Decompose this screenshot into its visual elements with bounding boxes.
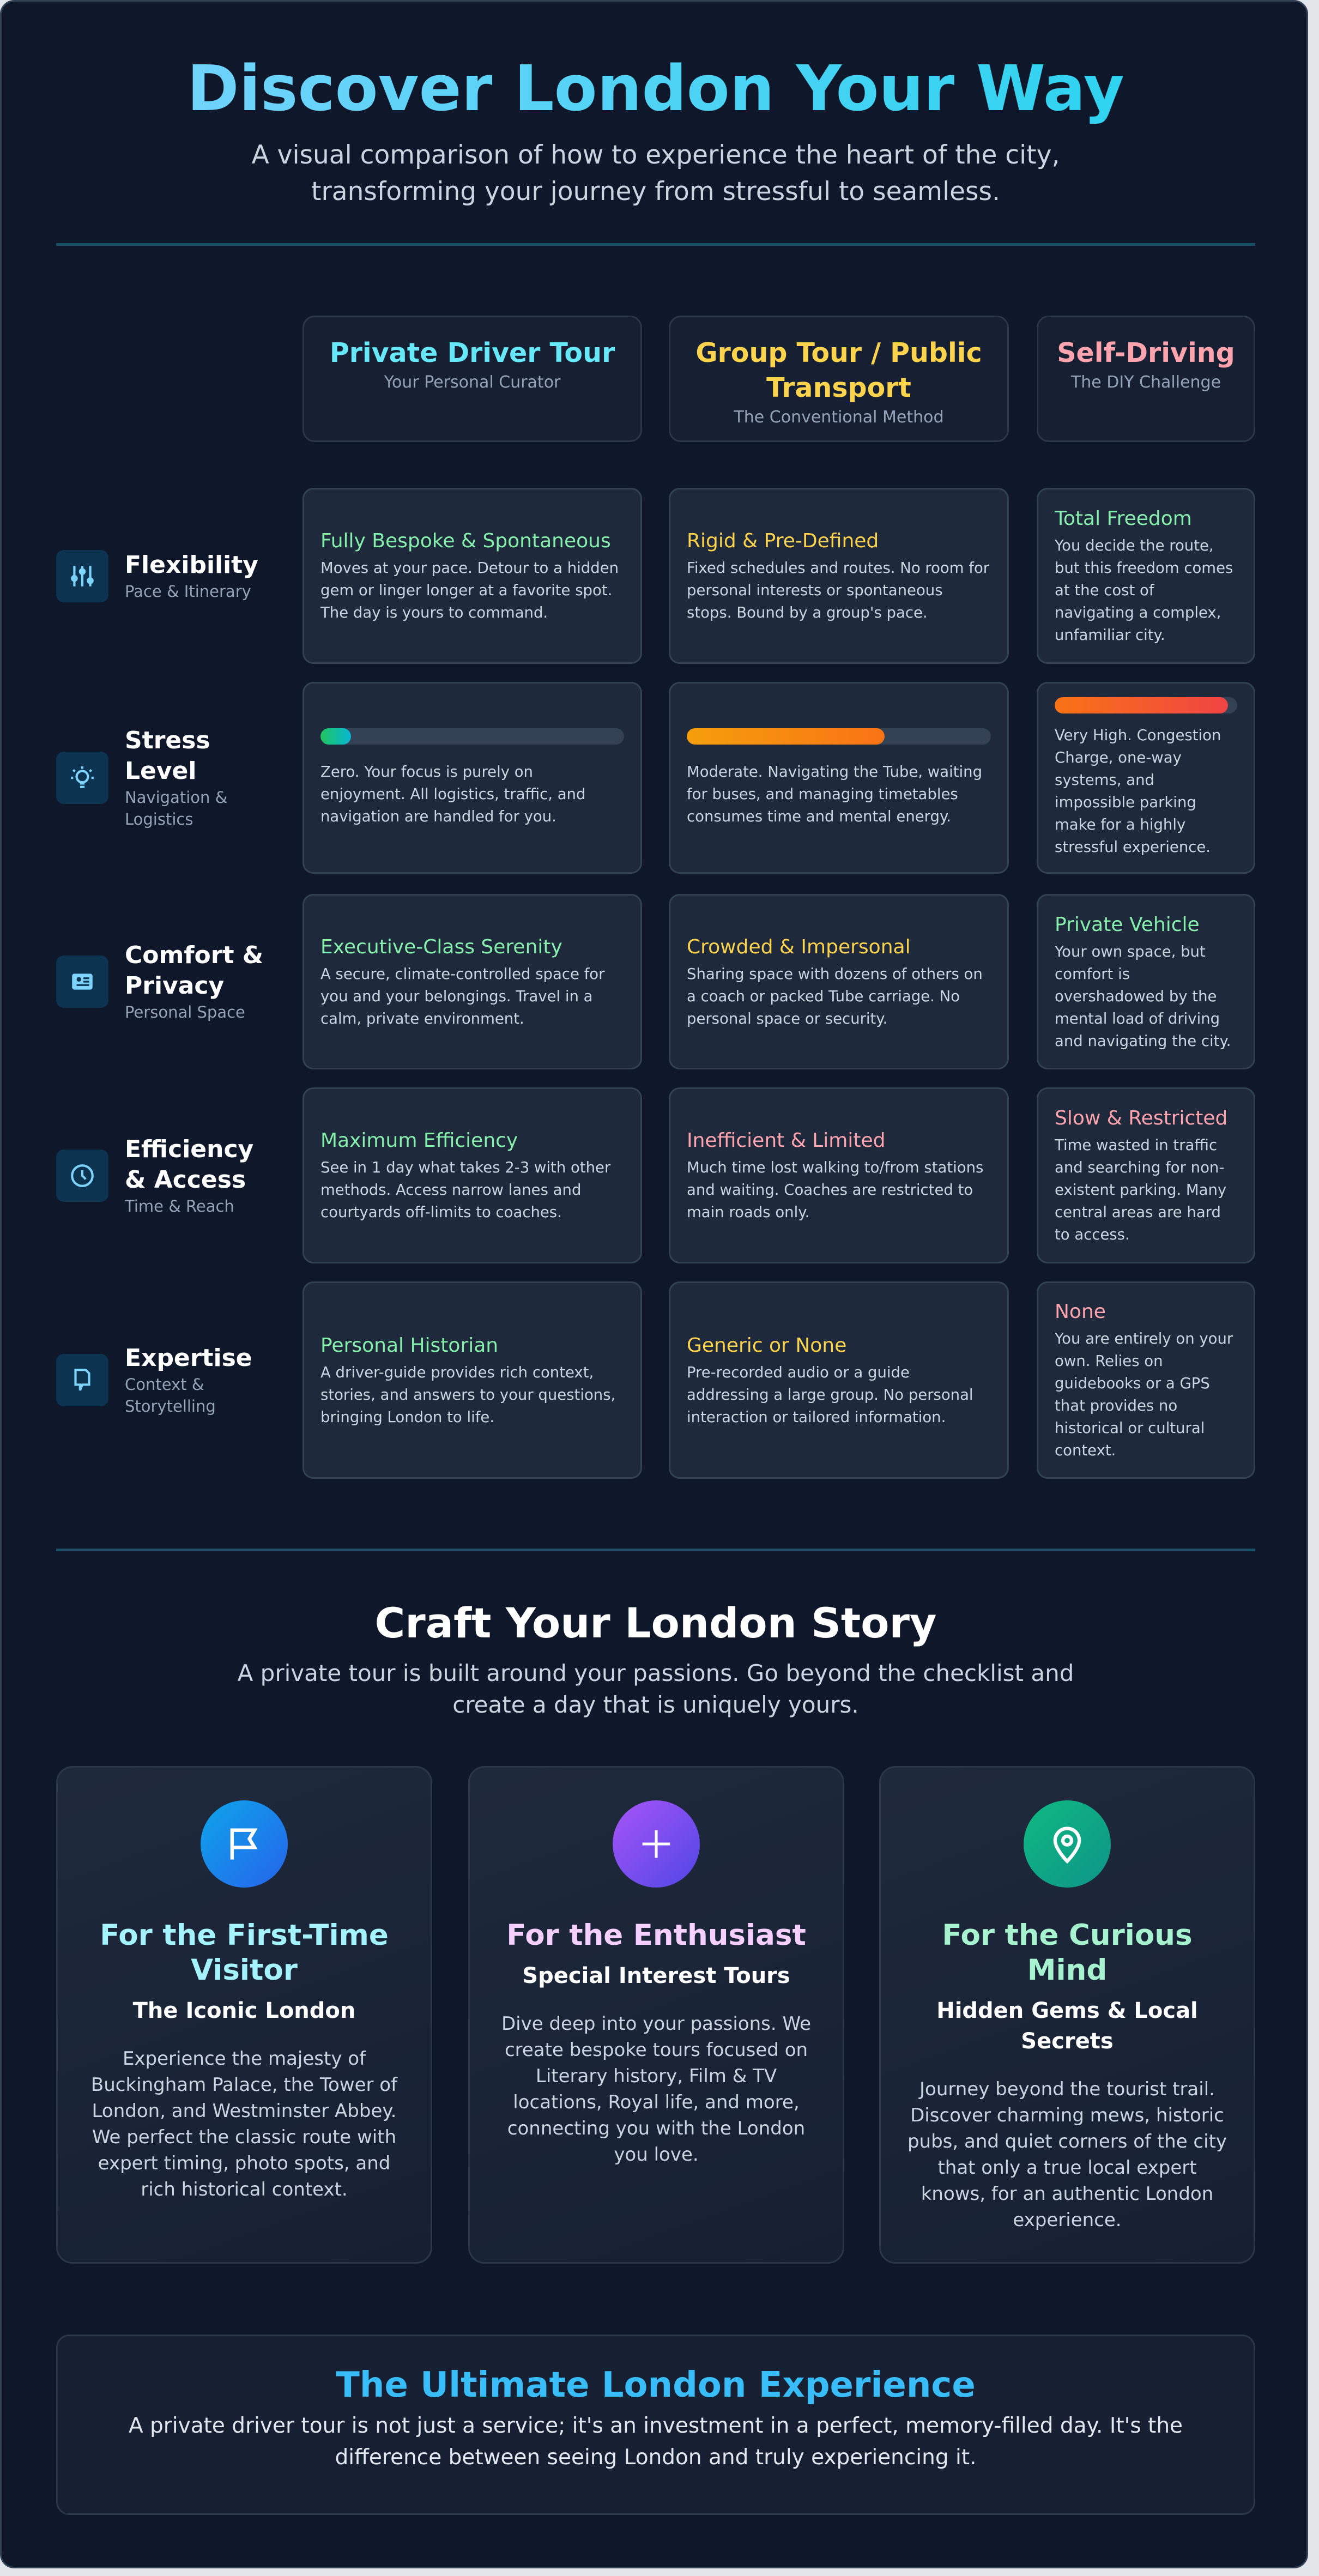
card: efficiency private: courtyards off-limits to coaches.: [320, 1204, 562, 1221]
persona card: first-time: The Iconic London: [133, 1998, 355, 2023]
row label: efficiency: Time & Reach: [125, 1197, 234, 1216]
row label: efficiency: & Access: [125, 1165, 246, 1194]
persona card: curious: For the Curious Mind: [942, 1919, 1193, 1987]
card: stress self: [1037, 682, 1255, 874]
column header: private driver: Your Personal Curator: [384, 373, 560, 392]
row label: comfort: [56, 941, 263, 1021]
card: expertise self: None: [1055, 1301, 1106, 1323]
card: comfort private: Executive-Class Serenity: [320, 935, 562, 958]
card: stress private: Zero. Your focus is purely on: [320, 763, 533, 781]
card: flex group: Fixed schedules and routes. No room for personal interests or spontaneous stops. Bound by a group's pace.: [687, 559, 989, 621]
persona card: enthusiast: For the Enthusiast: [506, 1919, 806, 1952]
card: efficiency private: [302, 1087, 642, 1263]
card: efficiency group: [669, 1087, 1009, 1263]
icon: flag: [201, 1800, 288, 1888]
section subtitle: A private tour is built around your passions. Go beyond the checklist and create a day that is uniquely yours.: [238, 1660, 1074, 1718]
persona card: first-time: Experience the majesty of Buckingham Palace, the Tower of London, and Westminster Abbey. We perfect the classic route with expert timing, photo spots, and rich historical context.: [91, 2048, 397, 2200]
card: flex self: Total Freedom: [1055, 507, 1192, 530]
icon: plus: [613, 1800, 700, 1888]
card: expertise group: Generic or None: [687, 1334, 846, 1356]
card: comfort self: Private Vehicle: [1055, 914, 1200, 935]
row label: efficiency: [56, 1135, 253, 1216]
card: flex self: You decide the route, but this freedom comes at the cost of navigating a complex, unfamiliar city.: [1055, 537, 1233, 644]
row label: comfort: Privacy: [125, 972, 224, 1000]
card: expertise private: A driver-guide provides rich context, stories, and answers to your questions, bringing London to life.: [320, 1364, 615, 1426]
persona card: enthusiast: Special Interest Tours: [522, 1963, 790, 1988]
row label: comfort: Comfort &: [125, 941, 263, 969]
column header: private driver: [302, 316, 642, 442]
row label: efficiency: Efficiency: [125, 1135, 253, 1163]
card: efficiency self: [1037, 1087, 1255, 1263]
row label: flexibility: [56, 550, 258, 602]
title: [2, 45, 1310, 132]
card: stress group: [669, 682, 1009, 874]
row label: stress: [56, 727, 227, 829]
card: stress group: Moderate. Navigating the Tube, waiting for buses, and managing timetables consumes time and mental energy.: [687, 763, 982, 825]
row label: flexibility: Flexibility: [125, 551, 258, 579]
column header: group tour: Group Tour / Public Transport: [695, 337, 982, 403]
closing callout: A private driver tour is not just a service; it's an investment in a perfect, memory-filled day. It's the difference between seeing London and truly experiencing it.: [129, 2414, 1183, 2470]
card: comfort group: Sharing space with dozens of others on a coach or packed Tube carriage. No personal space or security.: [687, 965, 983, 1027]
section heading: Craft Your London Story: [375, 1599, 936, 1647]
card: efficiency private: See in 1 day what takes 2-3 with other methods. Access narrow lanes and: [320, 1159, 610, 1199]
card: comfort self: Your own space, but comfort is overshadowed by the mental load of driving and navigating the city.: [1055, 943, 1231, 1050]
card: efficiency group: Much time lost walking to/from stations and waiting. Coaches are restricted to main roads only.: [687, 1159, 983, 1221]
card: flex private: Fully Bespoke & Spontaneous: [320, 530, 611, 552]
card: stress private: [302, 682, 642, 874]
persona card: enthusiast: Dive deep into your passions. We create bespoke tours focused on Literary history, Film & TV locations, Royal life, and more, connecting you with the London you love.: [501, 2013, 811, 2166]
column header: private driver: Private Driver Tour: [330, 337, 615, 368]
row label: expertise: Storytelling: [125, 1397, 216, 1416]
row label: stress: Stress: [125, 727, 210, 754]
persona card: curious: [879, 1766, 1255, 2264]
card: stress self: Very High. Congestion Charge, one-way systems, and impossible parking make for a highly stressful experience.: [1055, 727, 1221, 856]
row label: stress: Navigation &: [125, 788, 227, 807]
card: flex group: [669, 488, 1009, 664]
card: comfort group: Crowded & Impersonal: [687, 935, 911, 958]
row label: stress: Level: [125, 757, 196, 785]
row label: expertise: Context &: [125, 1375, 204, 1394]
card: expertise self: [1037, 1281, 1255, 1479]
card: expertise group: addressing a large group. No personal interaction or tailored information.: [687, 1386, 973, 1426]
card: comfort private: [302, 894, 642, 1069]
persona card: enthusiast: [468, 1766, 844, 2264]
card: comfort group: [669, 894, 1009, 1069]
card: stress private: enjoyment. All logistics, traffic, and navigation are handled for you.: [320, 785, 585, 825]
row label: comfort: Personal Space: [125, 1003, 245, 1021]
subtitle: A visual comparison of how to experience the heart of the city, transforming your journey from stressful to seamless.: [252, 140, 1060, 207]
column header: self-driving: [1037, 316, 1255, 442]
card: flex self: [1037, 488, 1255, 664]
card: expertise group: [669, 1281, 1009, 1479]
card: comfort self: [1037, 894, 1255, 1069]
persona card: curious: Hidden Gems & Local Secrets: [936, 1998, 1198, 2054]
column header: group tour: The Conventional Method: [734, 408, 944, 427]
title: Discover London Your Way: [187, 52, 1124, 125]
persona card: first-time: [56, 1766, 432, 2264]
row label: expertise: [56, 1344, 252, 1416]
persona card: curious: Journey beyond the tourist trail. Discover charming mews, historic pubs, and quiet corners of the city that only a true local expert knows, for an authentic London experience.: [907, 2078, 1227, 2231]
persona card: first-time: For the First-Time Visitor: [100, 1919, 389, 1987]
icon: pin: [1024, 1800, 1111, 1888]
column header: self-driving: The DIY Challenge: [1071, 373, 1221, 392]
card: efficiency private: Maximum Efficiency: [320, 1129, 518, 1152]
card: expertise group: Pre-recorded audio or a guide: [687, 1364, 910, 1381]
card: efficiency self: Slow & Restricted: [1055, 1107, 1227, 1129]
card: comfort private: A secure, climate-controlled space for you and your belongings. Travel in a calm, private environment.: [320, 965, 604, 1027]
closing callout: [56, 2335, 1255, 2515]
card: flex private: Moves at your pace. Detour to a hidden gem or linger longer at a favorite spot. The day is yours to command.: [320, 559, 619, 621]
card: expertise private: [302, 1281, 642, 1479]
column header: self-driving: Self-Driving: [1057, 337, 1235, 368]
card: flex private: [302, 488, 642, 664]
row label: expertise: Expertise: [125, 1344, 252, 1372]
row label: flexibility: Pace & Itinerary: [125, 582, 251, 601]
card: efficiency self: Time wasted in traffic and searching for non-existent parking. Many central areas are hard to access.: [1055, 1136, 1226, 1243]
card: expertise private: Personal Historian: [320, 1334, 498, 1356]
card: flex group: Rigid & Pre-Defined: [687, 530, 879, 552]
row label: stress: Logistics: [125, 810, 193, 829]
card: efficiency group: Inefficient & Limited: [687, 1129, 885, 1152]
card: expertise self: You are entirely on your own. Relies on guidebooks or a GPS that provides no historical or cultural context.: [1055, 1330, 1233, 1459]
column header: group tour: [669, 316, 1009, 442]
closing callout: The Ultimate London Experience: [336, 2365, 976, 2405]
